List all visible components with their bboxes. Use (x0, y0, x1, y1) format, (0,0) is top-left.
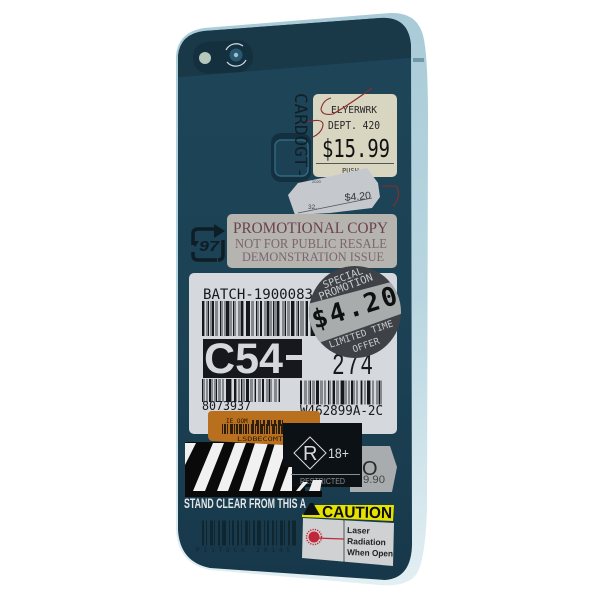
price tag: PUSH (342, 167, 359, 175)
price tag: DEPT. 420 (328, 119, 380, 132)
torn small label (288, 168, 380, 215)
rating diamond (294, 437, 326, 469)
barcode 1 (202, 301, 316, 336)
torn small label: 32. (308, 204, 317, 211)
hazard stripes (185, 442, 305, 497)
batch label (189, 273, 397, 434)
red scribble (307, 88, 372, 137)
caution sign: When Open (347, 547, 393, 559)
price tag: ELYERWRK (331, 105, 377, 116)
camera band (178, 18, 411, 77)
grey tag: O (362, 458, 378, 480)
faint barcode (196, 533, 297, 554)
promotional copy sticker: DEMONSTRATION ISSUE (242, 249, 384, 264)
recycle icon (191, 224, 225, 260)
promotional copy sticker: PROMOTIONAL COPY (233, 220, 388, 237)
batch label: BATCH-1900083 (203, 287, 313, 303)
fingerprint sensor (271, 133, 311, 182)
caution sign: CAUTION (322, 504, 392, 522)
grey tag (350, 446, 397, 492)
barcode 2 (202, 379, 280, 402)
special promotion sticker (309, 266, 401, 358)
special promotion sticker: PROMOTION (317, 271, 375, 303)
orange label (208, 411, 320, 447)
caution sign: Radiation (347, 536, 386, 547)
price tag (307, 88, 397, 177)
grey tag: 9.90 (363, 474, 385, 486)
laser icon (306, 530, 344, 544)
promotional copy sticker: NOT FOR PUBLIC RESALE (235, 237, 387, 252)
restricted 18+ label: 18+ (328, 445, 349, 461)
restricted 18+ label: R (303, 443, 317, 465)
special promotion sticker: OFFER (351, 336, 382, 355)
red mark (382, 186, 398, 206)
torn small label: 2020 (312, 179, 322, 184)
caution sign: Laser (347, 525, 371, 536)
barcode 3 (300, 380, 383, 404)
orange label: LSDBECOMT (237, 435, 283, 443)
batch label: 8073937 (202, 399, 251, 413)
restricted 18+ label (283, 423, 362, 487)
code block (203, 339, 302, 378)
recycle icon: 97 (199, 238, 220, 255)
case edge (176, 13, 428, 585)
price tag: $15.99 (322, 134, 390, 163)
orange label: IE_OOM (226, 418, 248, 425)
camera lens (224, 42, 248, 68)
phone case (170, 13, 428, 585)
camera surround (192, 39, 254, 75)
promotional copy sticker (227, 214, 397, 268)
special promotion sticker: SPECIAL (321, 266, 365, 291)
batch label: W462899A-2C (300, 404, 383, 419)
number 274: 274 (332, 348, 373, 383)
special promotion sticker: LIMITED TIME (328, 319, 395, 351)
phone back (178, 18, 412, 580)
caution sign (302, 503, 394, 566)
restricted 18+ label: RESTRICTED (300, 477, 345, 486)
stand clear text: STAND CLEAR FROM THIS A (184, 495, 306, 511)
batch label: C54 (204, 335, 283, 383)
torn small label: $4.20 (344, 190, 372, 204)
vertical text: CARDOGT- (290, 93, 310, 178)
faint barcode: P11TOCK 20145 (196, 547, 290, 554)
white stripe tail (296, 480, 322, 491)
special promotion sticker: $4.20 (308, 281, 401, 336)
flash (199, 52, 211, 64)
